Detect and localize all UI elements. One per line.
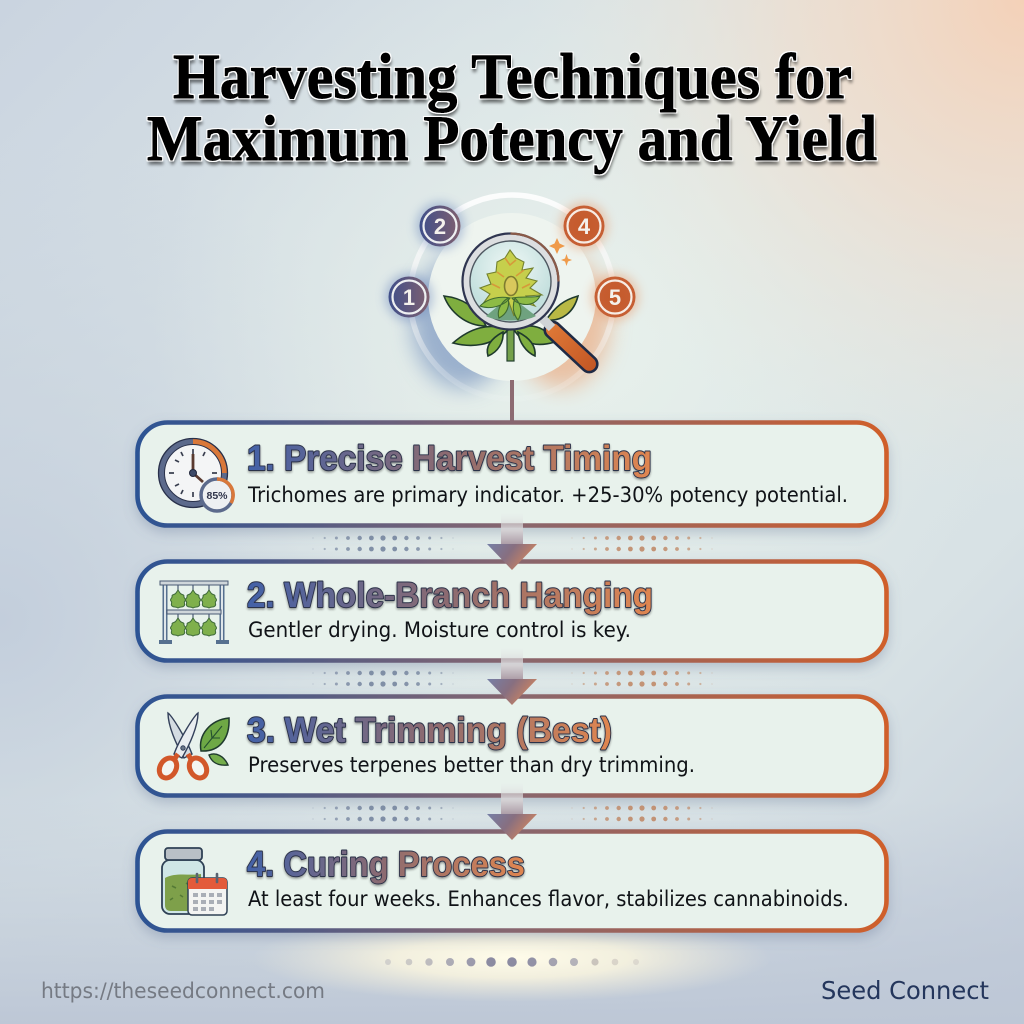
title: Harvesting Techniques for xyxy=(173,41,852,113)
central medallion xyxy=(385,195,639,422)
heading: 3. Wet Trimming (Best) xyxy=(247,711,612,750)
body text: Gentler drying. Moisture control is key. xyxy=(248,618,631,642)
panel: step 4 xyxy=(138,832,886,930)
icon: magnifying glass xyxy=(462,234,601,375)
icon: curing jar and calendar xyxy=(162,848,227,915)
icon: sparkles xyxy=(549,238,572,266)
footer url: https://theseedconnect.com xyxy=(41,979,325,1003)
panel: step 3 xyxy=(138,696,886,796)
panel: step 1 xyxy=(138,422,886,526)
body text: At least four weeks. Enhances flavor, stabilizes cannabinoids. xyxy=(248,887,849,911)
badge 2 xyxy=(416,202,464,250)
body text: Preserves terpenes better than dry trimming. xyxy=(248,753,695,777)
arrow: step 1 to 2 xyxy=(487,513,537,570)
icon: cannabis plant under magnifier xyxy=(444,296,578,361)
badge 2: 2 xyxy=(434,214,446,239)
heading: 1. Precise Harvest Timing xyxy=(247,439,652,478)
icon: clock with percentage badge: 85% xyxy=(206,490,228,502)
arrow: step 2 to 3 xyxy=(487,648,537,705)
badge 1 xyxy=(385,273,433,321)
icon: drying rack with hanging branches xyxy=(159,581,229,644)
badge 1: 1 xyxy=(403,285,415,310)
dotted separators xyxy=(312,535,713,822)
badge 5 xyxy=(591,273,639,321)
connector stem xyxy=(510,380,514,422)
footer dots xyxy=(385,957,639,967)
panel: step 2 xyxy=(138,562,886,660)
icon: clock with percentage badge xyxy=(158,438,233,511)
badge 4 xyxy=(560,202,608,250)
icon: scissors and leaves xyxy=(156,713,229,781)
title: Maximum Potency and Yield xyxy=(147,103,877,175)
title xyxy=(147,41,877,175)
footer brand: Seed Connect xyxy=(821,976,989,1005)
arrow: step 3 to 4 xyxy=(487,783,537,840)
badge 5: 5 xyxy=(609,285,621,310)
body text: Trichomes are primary indicator. +25-30% potency potential. xyxy=(247,483,848,507)
footer glow xyxy=(252,914,772,1002)
heading: 4. Curing Process xyxy=(247,845,525,884)
heading: 2. Whole-Branch Hanging xyxy=(247,576,653,615)
badge 4: 4 xyxy=(578,214,591,239)
